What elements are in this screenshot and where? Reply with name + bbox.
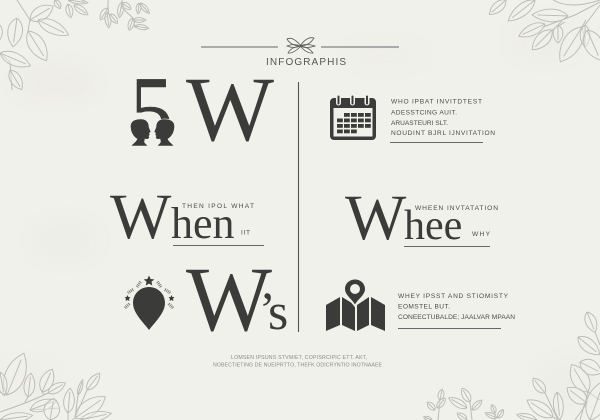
Whee small text [415, 205, 498, 238]
panel: map block [326, 278, 515, 331]
panel: Whee [345, 182, 498, 254]
When small text [182, 203, 254, 236]
foliage: top left corner [0, 0, 151, 92]
When small text: THEN IPOL WHAT [182, 203, 254, 210]
calendar text: ADESSTCING AUIT. [391, 110, 457, 116]
map text: WHEY IPSST AND STIOMISTY [398, 293, 509, 300]
big W with apostrophe s: W [186, 248, 272, 350]
icon: calendar [330, 94, 376, 140]
panel: calendar block [330, 94, 495, 142]
When small text: IIT [241, 230, 250, 236]
foliage: bottom right corner [423, 310, 600, 420]
When word: W [110, 181, 172, 253]
calendar text: WHO IPBAT INVITDTEST [391, 98, 482, 106]
big W: W [186, 58, 274, 160]
calendar text: ARUASTEURI SLT. [391, 120, 448, 127]
calendar text [391, 98, 495, 137]
Whee word: hee [404, 203, 462, 249]
icon: two facing heads [130, 119, 175, 146]
calendar text: NOUDINT BJRL IJNVITATION [391, 130, 495, 137]
footer text: NOBECTIETING DE NUEIPRTTO, THEFK ODICRYNTIO INOTNAAEE [213, 362, 383, 368]
divider [298, 82, 300, 332]
Whee small text: WHY [472, 231, 491, 238]
icon: folded map with pin [326, 278, 385, 331]
panel: 5 W heading [130, 57, 274, 169]
map text: EOMSTEL BUT. [398, 304, 450, 310]
map text [398, 293, 515, 321]
title: INFOGRAPHIS [266, 57, 346, 68]
icon: header ornament [287, 38, 315, 53]
footer text [213, 355, 383, 368]
panel: pin and W's: ’ [259, 281, 276, 337]
numeral 5: 5 [130, 57, 173, 169]
panel: pin and W's: s [268, 284, 288, 341]
When word: hen [171, 199, 235, 248]
foliage: bottom left corner [0, 350, 112, 420]
footer text: LOMSEN IPSUNS STVMIET, COPISRCIPIC ETT. AKT, [231, 355, 367, 361]
icon: pin with stars and sprigs [124, 276, 174, 330]
Whee small text: WHEEN INVTATATION [415, 205, 498, 212]
foliage: top right corner [486, 0, 600, 66]
map text: CONEECTUBALDE; JAALVAR MPAAN [398, 314, 515, 321]
panel: When [110, 181, 264, 253]
Whee word: W [345, 182, 407, 254]
header [201, 38, 399, 68]
panel: pin and W's [124, 248, 288, 350]
